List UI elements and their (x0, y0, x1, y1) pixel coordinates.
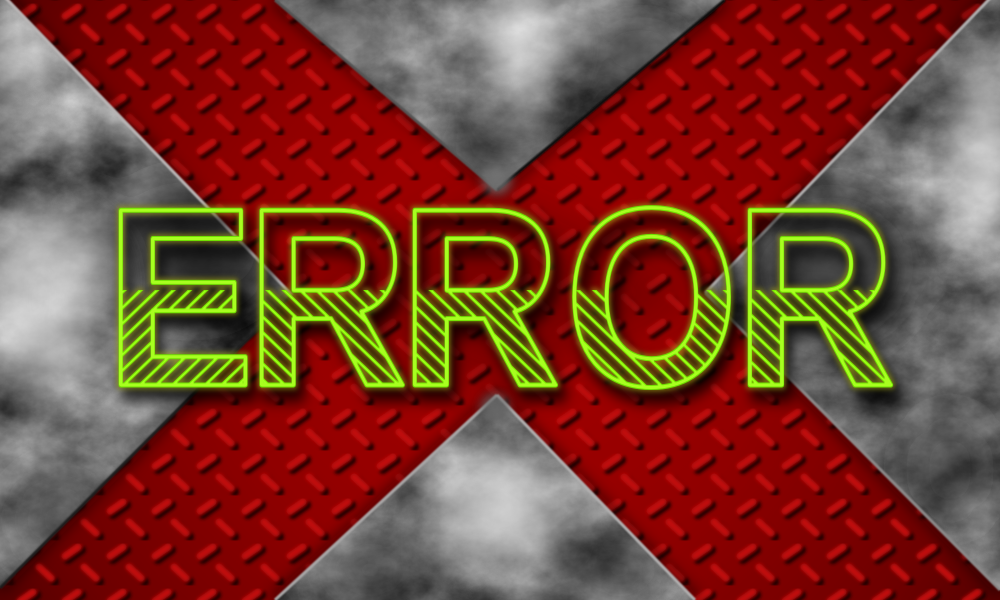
diagonal tube stripes: ERROR (106, 155, 895, 439)
word outline: ERROR (106, 155, 895, 439)
title: neon ERROR sign (113, 200, 907, 414)
rivet: bottom (481, 394, 509, 422)
rivet: top (483, 166, 511, 194)
